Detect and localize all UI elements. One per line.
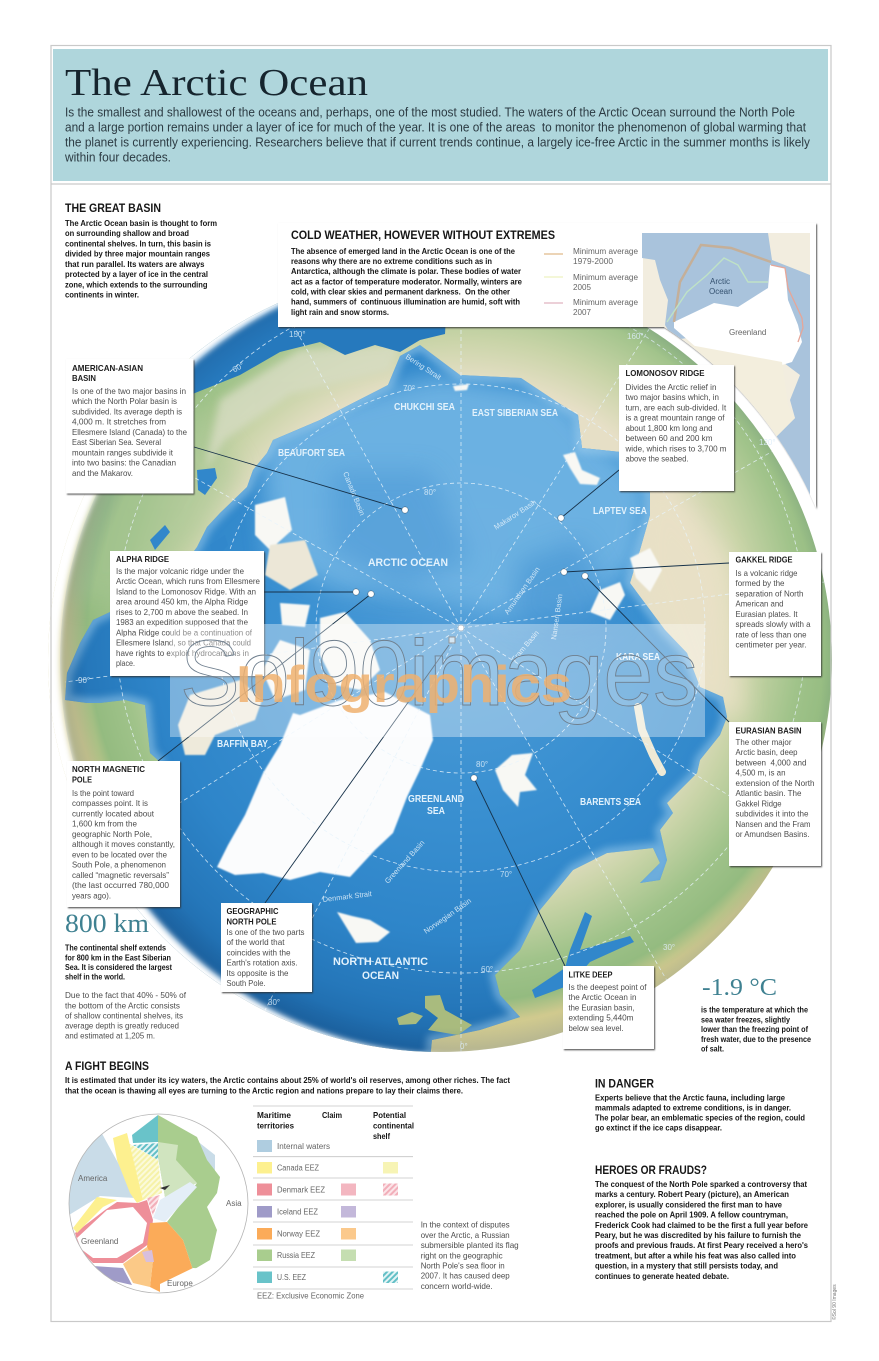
regular text [65,990,187,1041]
callout body: subdivides it into the [736,808,809,818]
regular text: of shallow continental shelves, its [65,1010,183,1020]
text block: Frederick Cook had claimed to be the first a full year before [595,1220,808,1230]
degree labels: 60° [481,965,493,974]
ice legend: 2007 [573,308,592,317]
callout body: even to be located over the [72,850,167,860]
intro text: that the ocean is thawing all eyes are turning to the Arctic region and nations prepare to lay their claims there. [65,1086,463,1096]
callout heading: ALPHA RIDGE [116,554,169,564]
callout body [72,788,175,900]
text block: The conquest of the North Pole sparked a controversy that [595,1179,807,1189]
callout body: currently located about [72,808,155,818]
table header: shelf [373,1131,390,1141]
graticule [65,327,824,1052]
callout body: Eurasian plates. It [736,609,798,619]
leader lines and markers [158,447,729,966]
maritime table [253,1106,414,1301]
callout: eurasian basin [729,722,821,866]
greenland [217,692,433,880]
degree labels: 60° [231,360,246,374]
panel paragraph: act as a factor of temperature moderator. Normally, winters are [291,276,522,286]
section: a fight begins [65,1061,519,1301]
text block: divided by three major mountain ranges [65,248,210,258]
intro paragraph: within four decades. [64,150,171,164]
degree labels: 90° [78,676,90,685]
callout body: formed by the [736,578,785,588]
callout body: into two basins: the Canadian [72,458,176,468]
panel paragraph: light rain and snow storms. [291,307,389,317]
inset labels [709,277,766,337]
degree labels: 80° [424,488,436,497]
baltic sea and lakes [150,468,634,998]
bold text: shelf in the world. [65,972,125,982]
callout body: above the seabed. [626,454,688,464]
callout body: rises to 2,700 m above the seabed. In [116,607,248,617]
degree labels: 150° [289,330,306,339]
callout body: extension of the North [736,778,815,788]
text block: continents in winter. [65,290,139,300]
text block: question, in a mystery that still persists today, and [595,1261,778,1271]
text block: reached the pole on April 1909. A fellow countryman, [595,1210,788,1220]
text block [595,1179,808,1281]
table header: continental [373,1121,414,1131]
territorial claims map [69,1114,248,1300]
pacific ocean [190,303,446,394]
table rows [257,1140,398,1283]
big number: -1.9 °C [702,975,777,1001]
callout: american-asian basin [66,359,194,494]
side note: submersible planted its flag [421,1240,519,1250]
callout body: called “magnetic reversals” [72,870,169,880]
callout body: American and [736,598,784,608]
ice legend: Minimum average [573,247,639,256]
callout body: is a great mountain range of [626,412,725,422]
callout heading: BASIN [72,373,96,383]
text block: on surrounding shallow and broad [65,228,189,238]
intro paragraph: the planet is currently experiencing. Researchers believe that if current trends continue, a largely ice-free Arctic in the summer months is likely [65,136,811,150]
sea labels: BARENTS SEA [580,797,641,808]
callout body: Island to the Lomonosov Ridge. With an [116,586,256,596]
map labels: Europe [167,1279,193,1288]
side note [421,1220,519,1291]
arctic islands [178,384,662,943]
callout body: separation of North [736,588,804,598]
image credit: ©Sol 90 Images [831,1284,838,1320]
callout heading [226,906,278,927]
callout body: wide, which rises to 3,700 m [625,444,726,454]
degree labels: 80° [476,760,488,769]
callout body: Is the deepest point of [568,982,647,992]
panel paragraph: hand, summers of continuous illumination are humid, soft with [291,296,520,306]
callout body: East Siberian Sea. Several [72,437,161,447]
callout body: centimeter per year. [736,640,806,650]
callout body: The other major [736,737,792,747]
text block: proofs and previous frauds. At first Peary received a hero's [595,1240,808,1250]
text block: is the temperature at which the [701,1005,808,1015]
basin and strait labels: Canada Basin [341,470,367,517]
callout: gakkel ridge [729,552,821,676]
intro paragraph [64,106,811,164]
callout body: or Amundsen Basins. [736,829,810,839]
sea labels: CHUKCHI SEA [394,402,455,413]
british isles [397,995,472,1035]
panel paragraph: reasons why there are no extreme conditions such as in [291,256,492,266]
callout body: Arctic Ocean, which runs from Ellesmere [116,576,260,586]
callout body: Ellesmere Island, so that Canada could [116,638,251,648]
callout body: about 1,800 km long and [626,423,713,433]
basin and strait labels: Norwegian Basin [422,896,473,936]
callout heading: NORTH MAGNETIC [72,764,145,774]
section: -1.9 degrees [701,975,811,1054]
table rows: Denmark EEZ [277,1186,325,1194]
callout body: which the North Polar basin is [71,396,177,406]
intro text [65,1075,510,1096]
table header [257,1110,414,1141]
bold text: The continental shelf extends [65,943,166,953]
sea labels: GREENLAND [408,794,464,805]
ice legend: Minimum average [573,298,639,307]
table rows: Russia EEZ [277,1251,315,1260]
callout body: Is one of the two parts [226,927,304,937]
inset labels: Arctic [710,277,730,286]
inset map: sea ice minimum [642,233,810,513]
callout heading [72,764,145,785]
callout body [71,386,187,478]
map labels: America [78,1174,108,1183]
callout: geographic north pole [221,903,312,992]
callout body: two major basins which, in [626,392,719,402]
callout body: 1983 an expedition supposed that the [116,617,248,627]
bold text [65,943,172,982]
text block: treatment, but after a while his feat was also called into [595,1250,796,1260]
text block: The polar bear, an emblematic species of the region, could [595,1113,805,1123]
text block: continues to generate heated debate. [595,1271,729,1281]
callout heading: POLE [72,775,92,785]
panel heading: COLD WEATHER, HOWEVER WITHOUT EXTREMES [291,230,555,242]
degree labels: 160° [627,332,644,341]
soft limb fade [48,303,469,1052]
callout body: have rights to exploit hydrocarbons in [116,648,249,658]
panel: cold weather [278,223,816,513]
callout: north magnetic pole [67,761,180,907]
text block: mammals adapted to extreme conditions, is in danger. [595,1103,791,1113]
regular text: average depth is greatly reduced [65,1021,179,1031]
degree labels: 70° [403,384,415,393]
callout body: below sea level. [568,1023,624,1033]
heading: IN DANGER [595,1079,655,1091]
callout body: Is a volcanic ridge [736,568,798,578]
panel paragraph: Antarctica, although the climate is polar. These bodies of water [291,266,522,276]
callout: lomonosov ridge [619,365,734,491]
callout body: Nansen and the Fram [736,819,810,829]
bold text: Sea. It is considered the largest [65,962,172,972]
callout body: mountain ranges subdivide it [72,448,174,458]
text block [595,1093,805,1133]
callout: litke deep [563,966,654,1049]
callout heading: LOMONOSOV RIDGE [626,368,705,378]
basin and strait labels: Greenland Basin [383,838,426,885]
section: in danger [595,1079,805,1133]
sea labels: SEA [427,806,445,817]
text block: marks a century. Robert Peary (picture), an American [595,1189,789,1199]
basin and strait labels [322,352,564,936]
callout body: Ellesmere Island (Canada) to the [72,427,187,437]
text block [65,218,217,300]
text block: zone, which extends to the surrounding [65,280,208,290]
sea labels: OCEAN [362,970,399,982]
callout body: coincides with the [226,948,291,958]
table rows: Iceland EEZ [277,1208,318,1216]
sea labels: ARCTIC OCEAN [368,557,448,569]
degree labels: 30° [268,998,280,1007]
basin and strait labels: Amundsen Basin [502,565,542,616]
header band [51,49,831,184]
panel paragraph: cold, with clear skies and permanent darkness. On the other [291,286,511,296]
callout body: spreads slowly with a [736,619,811,629]
side note: North Pole's sea floor in [421,1260,505,1270]
ice legend: Minimum average [573,273,639,282]
callout body: of the world that [226,937,285,947]
text block: that run parallel. Its waters are always [65,259,205,269]
callout body: compasses point. It is [72,798,148,808]
sea labels: EAST SIBERIAN SEA [472,408,558,419]
inset labels: Greenland [729,328,766,337]
map labels: Greenland [81,1237,118,1246]
heading: A FIGHT BEGINS [65,1061,149,1073]
heading: THE GREAT BASIN [65,203,161,215]
callout body: 4,000 m. It stretches from [72,416,166,426]
callout body: the Eurasian basin, [568,1002,634,1012]
callout body: Divides the Arctic relief in [626,382,717,392]
basin and strait labels: Nansen Basin [549,593,564,640]
globe map [48,303,832,1052]
table rows: Internal waters [277,1142,330,1151]
basin and strait labels: Makarov Basin [492,498,538,532]
callout body: 1,600 km from the [72,818,137,828]
watermark: Sol90images [180,621,698,725]
callout body: Earth's rotation axis. [226,958,298,968]
callout body: (the last occurred 780,000 [72,880,169,890]
callout body: Atlantic basin. The [736,788,802,798]
intro paragraph: Is the smallest and shallowest of the oceans and, perhaps, one of the most studied. The waters of the Arctic Ocean surround the North Pole [65,106,795,120]
inset labels: Ocean [709,287,733,296]
sea labels: BAFFIN BAY [217,739,268,750]
degree labels: 120° [759,438,776,447]
text block: Peary, but he was discredited by his failure to furnish the [595,1230,801,1240]
callout heading: LITKE DEEP [568,970,613,980]
ice legend [544,247,639,317]
callout body [568,982,647,1033]
callout heading: GAKKEL RIDGE [736,555,793,565]
callout: alpha ridge [110,551,264,676]
callout body: Is the major volcanic ridge under the [116,566,244,576]
callout body [116,566,260,668]
text block: fresh water, due to the presence [701,1034,811,1044]
section: heroes or frauds [595,1165,808,1281]
ice legend: 2005 [573,283,592,292]
text block: explorer, is usually considered the first man to have [595,1199,782,1209]
degree labels: 0° [460,1042,468,1051]
side note: In the context of disputes [421,1220,510,1230]
callout body: South Pole, a phenomenon [72,860,166,870]
callout body: Its opposite is the [226,968,289,978]
text block: Experts believe that the Arctic fauna, including large [595,1093,785,1103]
callout body: Is one of the two major basins in [72,386,186,396]
text block: sea water freezes, slightly [701,1014,790,1024]
panel paragraph [291,246,522,317]
map labels [78,1174,242,1288]
callout body: Alpha Ridge could be a continuation of [116,628,253,638]
basin and strait labels: Denmark Strait [322,889,372,904]
side note: concern world-wide. [421,1281,493,1291]
callout heading: EURASIAN BASIN [736,725,802,735]
title: The Arctic Ocean [65,62,368,104]
callout heading [72,363,143,383]
degree labels: 70° [500,870,512,879]
callout body: subdivided. Its average depth is [72,406,182,416]
callout body: extending 5,440m [568,1012,634,1022]
degree labels: 30° [663,943,675,952]
callout heading: NORTH POLE [226,917,277,927]
callout body: although it moves constantly, [72,839,175,849]
text block: of salt. [701,1044,724,1054]
callout body: Gakkel Ridge [736,798,782,808]
callout body: place. [116,658,135,668]
basin and strait labels: Bering Strait [404,352,443,382]
bold text: for 800 km in the East Siberian [65,952,171,962]
callout body: 4,500 m, is an [736,768,786,778]
table header: territories [257,1121,294,1131]
side note: 2007. It has caused deep [421,1271,510,1281]
callout body: between 60 and 200 km [626,433,712,443]
map labels: Asia [226,1199,242,1208]
sea labels: LAPTEV SEA [593,506,647,517]
ice legend: 1979-2000 [573,257,614,266]
callout body [226,927,304,988]
table header: Potential [373,1110,406,1120]
text block: The Arctic Ocean basin is thought to form [65,218,217,228]
sea labels: KARA SEA [616,652,660,663]
table rows: Norway EEZ [277,1230,320,1238]
table note: EEZ: Exclusive Economic Zone [257,1292,365,1301]
big number: 800 km [65,909,149,938]
regular text: and estimated at 1,205 m. [65,1031,155,1041]
intro text: It is estimated that under its icy waters, the Arctic contains about 25% of world's oil reserves, among other riches. The fact [65,1075,510,1085]
text block: lower than the freezing point of [701,1024,808,1034]
intro paragraph: and a large portion remains under a layer of ice for much of the year. It is one of the areas to monitor the phenomenon of global warming that [65,120,806,134]
side note: over the Arctic, a Russian [421,1230,510,1240]
table rows: Canada EEZ [277,1164,319,1172]
side note: right on the geographic [421,1250,503,1260]
callout heading: GEOGRAPHIC [226,906,278,916]
callout body [736,737,815,839]
callout body: and the Makarov. [72,468,133,478]
text block [701,1005,811,1054]
callout body [736,568,811,650]
degree labels [78,330,776,1051]
callout body: South Pole. [226,978,266,988]
text block: protected by a layer of ice in the central [65,269,208,279]
section: 800 km [65,909,187,1041]
regular text: the bottom of the Arctic consists [65,1000,180,1010]
table rows: U.S. EEZ [277,1273,306,1282]
text block: go extinct if the ice caps disappear. [595,1123,722,1133]
callout body: Is the point toward [72,788,134,798]
callout body: Arctic basin, deep [736,747,798,757]
heading: HEROES OR FRAUDS? [595,1165,707,1177]
globe limb shading [60,265,850,1055]
callout body: area around 450 km, the Alpha Ridge [116,596,248,606]
watermark: Infographics [236,656,572,714]
callout body: between 4,000 and [736,758,807,768]
basin and strait labels: Fram Basin [510,629,541,663]
table header: Maritime [257,1110,291,1120]
panel paragraph: The absence of emerged land in the Arctic Ocean is one of the [291,246,515,256]
text block: continental shelves. In turn, this basin is [65,238,211,248]
callout heading: AMERICAN-ASIAN [72,363,143,373]
callout body: rate of less than one [736,630,807,640]
callout body: geographic North Pole, [72,829,152,839]
callout body: the Arctic Ocean in [568,992,637,1002]
regular text: Due to the fact that 40% - 50% of [65,990,187,1000]
callout body: turn, are each sub-divided. It [626,402,727,412]
table header: Claim [322,1110,342,1120]
sea labels: BEAUFORT SEA [278,448,345,459]
section: the great basin [65,203,217,300]
callout body: years ago). [72,890,111,900]
callout body [625,382,727,464]
sea labels [217,402,660,982]
sea labels: NORTH ATLANTIC [333,956,428,968]
